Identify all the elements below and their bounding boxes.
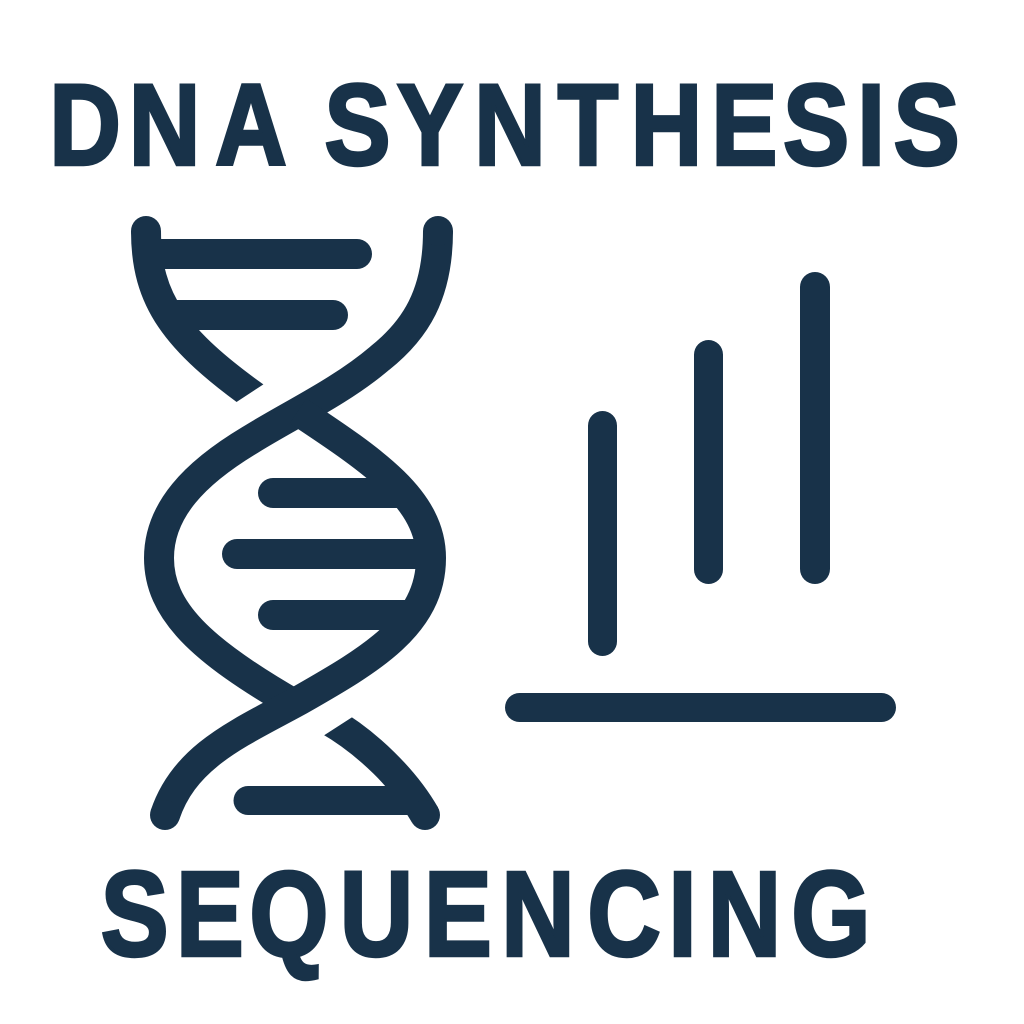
- bar chart icon: [505, 272, 896, 722]
- chart baseline: [505, 693, 896, 722]
- bar 3: [800, 272, 830, 584]
- rung 2: [170, 300, 348, 330]
- strand: upper right sweeping to left bulge: [159, 231, 438, 705]
- title: DNA Synthesis: DNA SYNTHESIS: [49, 60, 960, 189]
- rung 6: [234, 786, 410, 815]
- strand: upper left, angled cut at crossing: [146, 231, 258, 399]
- bar 1: [588, 411, 617, 656]
- icon: DNA double helix: [131, 216, 453, 830]
- heading: Sequencing: SEQUENCING: [101, 846, 870, 981]
- strand end cap: upper left: [131, 216, 161, 246]
- strand end cap: upper right: [423, 216, 453, 246]
- strand: right bulge sweeping to lower left: [165, 411, 431, 815]
- strand: lower right, angled cut at crossing: [328, 720, 425, 815]
- rung 1: [146, 239, 372, 269]
- bar 2: [694, 340, 723, 584]
- rung 5: [258, 600, 412, 630]
- rung 3: [258, 478, 400, 508]
- strand end cap: lower right: [410, 800, 440, 830]
- rung 4: [222, 539, 425, 569]
- strand end cap: lower left: [150, 800, 180, 830]
